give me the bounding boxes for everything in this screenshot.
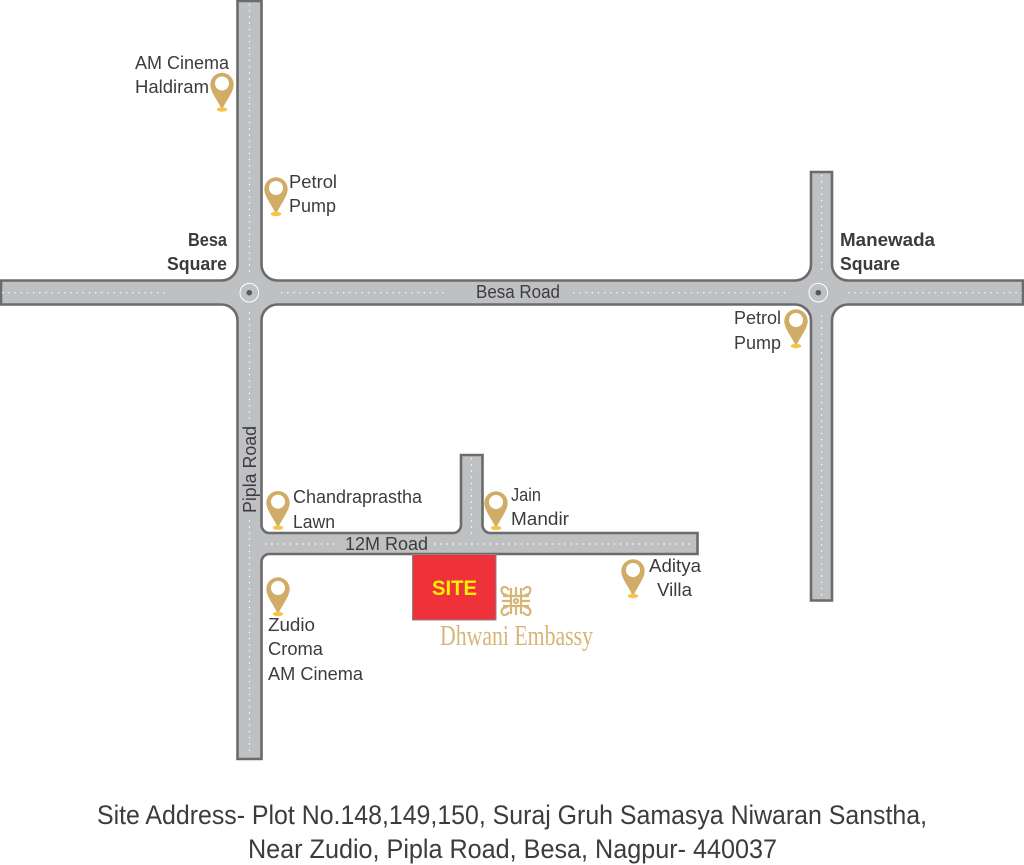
site marker: SITE xyxy=(432,577,477,600)
logo wordmark: Dhwani Embassy xyxy=(440,621,593,652)
site marker xyxy=(412,554,496,620)
label: Petrol Pump north: Pump xyxy=(289,196,336,216)
label: Aditya Villa: Villa xyxy=(657,580,693,600)
pin: Aditya Villa xyxy=(621,559,645,598)
label: AM Cinema Haldiram: AM Cinema xyxy=(135,53,230,73)
site address xyxy=(97,800,927,864)
label: AM Cinema Haldiram: Haldiram xyxy=(135,77,209,97)
label: Zudio Croma AM Cinema xyxy=(268,615,364,684)
label: Pipla Road: Pipla Road xyxy=(240,426,260,513)
label: Jain Mandir: Jain xyxy=(511,485,541,505)
site address: Near Zudio, Pipla Road, Besa, Nagpur- 440037 xyxy=(248,834,777,864)
label: Chandraprastha Lawn: Chandraprastha xyxy=(293,487,423,507)
site address: Site Address- Plot No.148,149,150, Suraj Gruh Samasya Niwaran Sanstha, xyxy=(97,800,927,830)
pin: Petrol Pump north xyxy=(264,177,288,216)
label: Petrol Pump east xyxy=(734,308,781,353)
pin: Jain Mandir xyxy=(484,491,508,530)
label: Aditya Villa xyxy=(649,556,702,600)
logo: Dhwani Embassy xyxy=(440,587,593,652)
label: Zudio Croma AM Cinema: Croma xyxy=(268,639,324,659)
label: Jain Mandir xyxy=(511,485,569,529)
label: Petrol Pump north xyxy=(289,172,337,216)
pin: AM Cinema Haldiram xyxy=(210,73,234,112)
pin: Chandraprastha Lawn xyxy=(266,491,290,530)
roundabout: Besa Square xyxy=(240,283,259,302)
label: Manewada Square: Square xyxy=(840,254,900,274)
roundabout: Manewada Square xyxy=(809,283,828,302)
pin: Zudio Croma AM Cinema xyxy=(266,577,290,616)
label: Jain Mandir: Mandir xyxy=(511,509,569,529)
label: Petrol Pump east: Pump xyxy=(734,333,781,353)
pin: Petrol Pump east xyxy=(784,309,808,348)
label: Petrol Pump east: Petrol xyxy=(734,308,781,328)
label: Chandraprastha Lawn: Lawn xyxy=(293,512,335,532)
label: Petrol Pump north: Petrol xyxy=(289,172,337,192)
label: Aditya Villa: Aditya xyxy=(649,556,702,576)
label: 12M Road: 12M Road xyxy=(345,534,428,554)
label: Besa Square: Besa xyxy=(188,230,228,250)
label: Besa Square: Square xyxy=(167,254,227,274)
label: Manewada Square xyxy=(840,230,936,274)
label: AM Cinema Haldiram xyxy=(135,53,230,97)
label: Besa Square xyxy=(167,230,228,274)
label: Manewada Square: Manewada xyxy=(840,230,936,250)
label: Zudio Croma AM Cinema: AM Cinema xyxy=(268,664,364,684)
label: Chandraprastha Lawn xyxy=(293,487,423,532)
label: Zudio Croma AM Cinema: Zudio xyxy=(268,615,315,635)
logo ornament xyxy=(502,587,530,615)
label: Besa Road: Besa Road xyxy=(476,282,560,302)
